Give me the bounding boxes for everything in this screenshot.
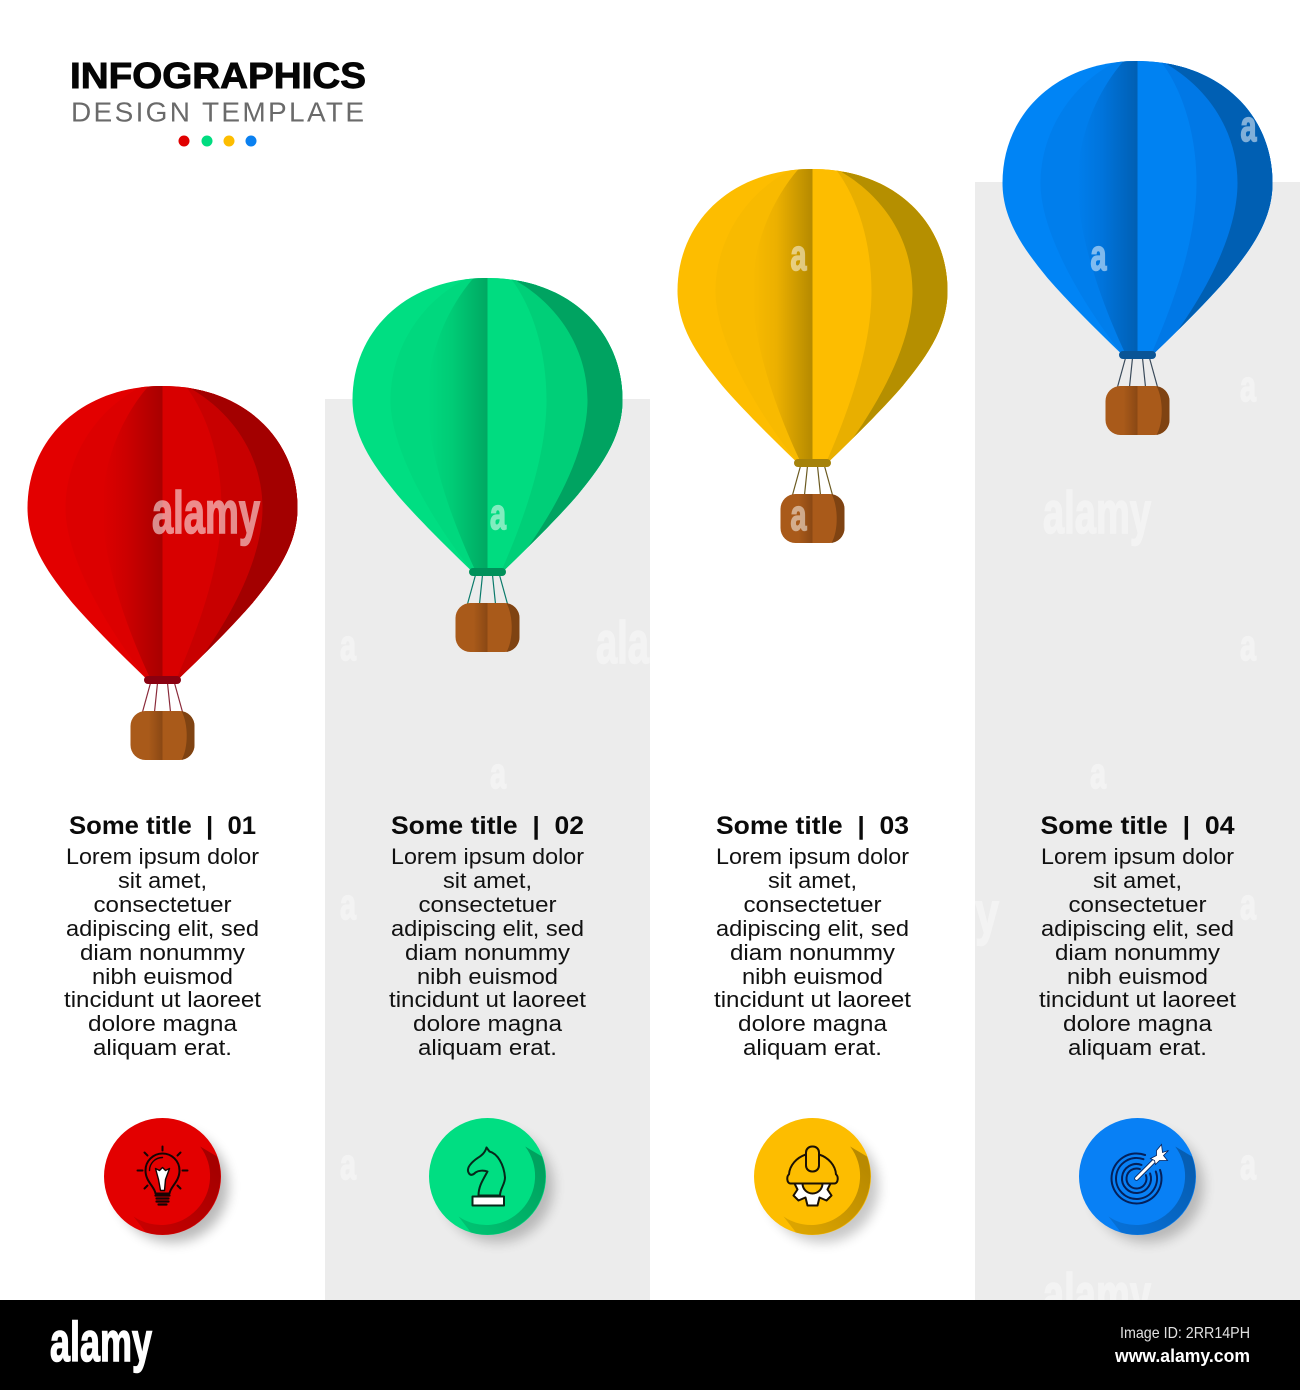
basket [456, 603, 520, 652]
step body: consectetuer [744, 892, 882, 917]
neck [144, 676, 181, 684]
balloon: green [348, 273, 628, 652]
basket [1106, 386, 1170, 435]
text block: column 4 [1039, 812, 1236, 1060]
step title: Some title | 04 [1041, 812, 1235, 840]
neck [794, 459, 831, 467]
step body: Lorem ipsum dolor [1041, 844, 1234, 869]
neck [1119, 351, 1156, 359]
envelope [348, 273, 628, 573]
icon badge: chess knight [429, 1118, 554, 1242]
watermark: a [790, 231, 807, 280]
ropes [142, 683, 182, 712]
footer logo: alamy [50, 1310, 152, 1373]
icon badge: target and arrow [1079, 1118, 1204, 1242]
step body: sit amet, [118, 868, 207, 893]
watermark marks on panels: a [1240, 362, 1256, 411]
watermark: a [490, 490, 506, 539]
balloon: red [22, 381, 302, 760]
panel: column 2 background [325, 399, 650, 1300]
image id: Image ID: 2RR14PH [1120, 1325, 1250, 1342]
icon: chess knight [468, 1148, 505, 1206]
step body: dolore magna [1063, 1011, 1213, 1036]
icon: helmet and gear [787, 1146, 838, 1206]
footer bar [0, 1300, 1300, 1390]
ropes [792, 466, 832, 495]
icon badge: helmet and gear [754, 1118, 878, 1242]
watermark marks on panels: a [340, 880, 356, 929]
watermark marks on panels: a [1240, 1140, 1256, 1189]
website: www.alamy.com [1114, 1346, 1250, 1366]
balloon: yellow [672, 164, 952, 543]
watermark marks on panels: alamy [596, 610, 704, 676]
step body: nibh euismod [417, 964, 558, 989]
step body: aliquam erat. [418, 1035, 557, 1060]
ropes [468, 575, 508, 604]
step body: dolore magna [738, 1011, 888, 1036]
balloon: blue [998, 56, 1278, 435]
step body: diam nonummy [730, 940, 895, 965]
step body: consectetuer [418, 892, 556, 917]
step body: dolore magna [88, 1011, 238, 1036]
step body: aliquam erat. [743, 1035, 882, 1060]
step body: dolore magna [413, 1011, 563, 1036]
text block: column 2 [389, 812, 586, 1060]
step body: adipiscing elit, sed [1041, 916, 1234, 941]
icon: target and arrow [1112, 1144, 1168, 1203]
step body [389, 844, 586, 1060]
text block: column 1 [64, 812, 261, 1060]
step body: aliquam erat. [93, 1035, 232, 1060]
subheading: DESIGN TEMPLATE [71, 96, 364, 128]
text block: column 3 [714, 812, 911, 1060]
icon: light bulb [138, 1146, 188, 1204]
step body: diam nonummy [1055, 940, 1220, 965]
step body: diam nonummy [405, 940, 570, 965]
watermark marks on panels: a [340, 621, 356, 670]
watermark marks on panels: y [975, 880, 999, 946]
step title: Some title | 02 [391, 812, 584, 840]
step body: diam nonummy [80, 940, 245, 965]
title block [70, 55, 366, 146]
step body: nibh euismod [742, 964, 883, 989]
step body: sit amet, [1093, 868, 1182, 893]
ropes [1118, 358, 1158, 387]
step body: tincidunt ut laoreet [64, 987, 261, 1012]
heading: INFOGRAPHICS [70, 55, 366, 96]
watermark on red balloon: alamy [152, 480, 260, 546]
watermark marks on panels: alamy [1043, 480, 1151, 546]
step body: sit amet, [768, 868, 857, 893]
step body: nibh euismod [92, 964, 233, 989]
neck [469, 568, 506, 576]
step body: tincidunt ut laoreet [1039, 987, 1236, 1012]
envelope [672, 164, 952, 464]
watermark: a [1090, 231, 1107, 280]
step body: adipiscing elit, sed [716, 916, 909, 941]
basket [780, 494, 844, 543]
step body: adipiscing elit, sed [66, 916, 259, 941]
basket [130, 711, 194, 760]
step body [64, 844, 261, 1060]
step body: tincidunt ut laoreet [714, 987, 911, 1012]
step body: sit amet, [443, 868, 532, 893]
step title: Some title | 01 [69, 812, 256, 840]
icon badge: light bulb [104, 1118, 228, 1242]
step body [714, 844, 911, 1060]
step body: aliquam erat. [1068, 1035, 1207, 1060]
step body: Lorem ipsum dolor [391, 844, 584, 869]
step body: tincidunt ut laoreet [389, 987, 586, 1012]
watermark marks on panels: a [1240, 880, 1256, 929]
step body: consectetuer [94, 892, 232, 917]
panel: column 4 background [975, 182, 1300, 1300]
watermark marks on panels: alamy [1043, 1262, 1151, 1328]
watermark marks on panels [340, 362, 1256, 1328]
step title: Some title | 03 [716, 812, 909, 840]
step body: Lorem ipsum dolor [716, 844, 909, 869]
step body: adipiscing elit, sed [391, 916, 584, 941]
watermark: a [790, 491, 807, 540]
watermark marks on panels: a [490, 749, 506, 798]
step body [1039, 844, 1236, 1060]
watermark marks on panels: a [340, 1140, 356, 1189]
step body: Lorem ipsum dolor [66, 844, 259, 869]
watermark marks on panels: a [1240, 621, 1256, 670]
step body: nibh euismod [1067, 964, 1208, 989]
colour dots [178, 136, 256, 146]
step body: consectetuer [1068, 892, 1206, 917]
envelope [998, 56, 1278, 356]
envelope [22, 381, 302, 681]
watermark marks on panels: a [1090, 749, 1106, 798]
watermark: a [1240, 102, 1257, 151]
